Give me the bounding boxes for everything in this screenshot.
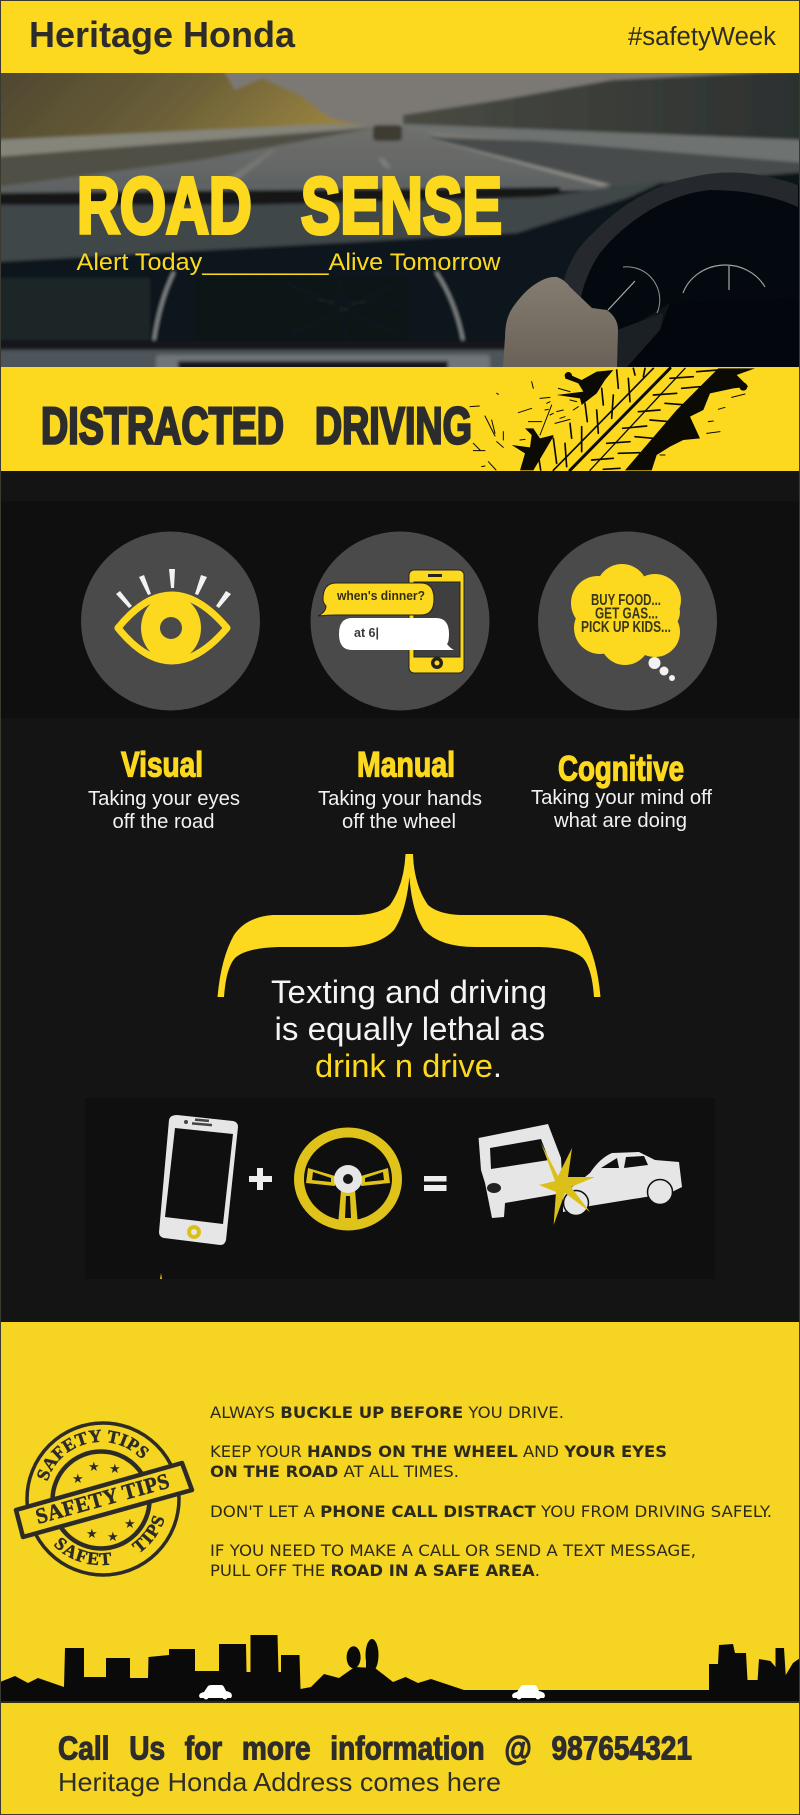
safety tips list: PULL OFF THE ROAD IN A SAFE AREA . [210, 1561, 540, 1580]
city skyline silhouette [0, 1635, 800, 1703]
car [199, 1685, 232, 1700]
safety tips stamp: ★ [86, 1526, 98, 1541]
column: cognitive: Cognitive [558, 750, 684, 788]
icon: phone [159, 1115, 238, 1245]
main title: ROAD SENSE [77, 161, 502, 250]
stamp arc text bottom: SAFET TIPS [54, 1515, 164, 1566]
distracted driving band [0, 367, 800, 471]
brand name: Heritage Honda [29, 14, 296, 55]
safety tips stamp: ★ [88, 1459, 100, 1474]
hero photo: driver's view of highway [0, 68, 800, 373]
safety tips list: ALWAYS BUCKLE UP BEFORE YOU DRIVE. [210, 1403, 564, 1422]
icon: cognitive distraction thought cloud: BUY FOOD... [591, 592, 661, 609]
icon: cognitive distraction thought cloud: GET GAS... [595, 606, 658, 622]
curly brace [218, 854, 600, 997]
statement text: drink n drive. [315, 1048, 502, 1084]
column: manual: off the wheel [342, 811, 456, 833]
equals sign [424, 1176, 446, 1191]
safety tips stamp [14, 1421, 194, 1577]
hashtag: #safetyWeek [628, 23, 776, 51]
icon: cognitive distraction thought cloud [538, 532, 717, 710]
tagline: Alert Today_________Alive Tomorrow [76, 249, 501, 276]
icon: visual distraction eye [81, 532, 260, 710]
steering wheel [563, 172, 800, 367]
section heading: DISTRACTED DRIVING [41, 398, 472, 456]
icon: truck and car crash [479, 1124, 682, 1225]
icon: cognitive distraction thought cloud: PICK UP KIDS... [581, 619, 671, 636]
icon: manual distraction phone and chat: when's dinner? [336, 588, 425, 603]
tire track [470, 368, 755, 470]
column: cognitive [531, 750, 712, 832]
icon: steering wheel [299, 1132, 397, 1226]
plus sign [249, 1168, 272, 1190]
header bar [0, 0, 800, 73]
safety tips stamp: ★ [107, 1529, 119, 1544]
column: cognitive: Taking your mind off [531, 787, 712, 809]
statement text [271, 974, 547, 1084]
safety tips stamp: ★ [124, 1516, 136, 1531]
column: manual: Manual [357, 746, 455, 784]
dark content panel [0, 471, 800, 1322]
safety tips stamp: ★ [109, 1461, 121, 1476]
statement text: is equally lethal as [274, 1011, 545, 1047]
stamp banner [16, 1463, 192, 1537]
phone [409, 570, 464, 673]
column: manual: Taking your hands [318, 788, 482, 810]
safety tips list: DON'T LET A PHONE CALL DISTRACT YOU FROM DRIVING SAFELY. [210, 1502, 772, 1521]
equation: phone plus wheel equals crash [159, 1115, 682, 1279]
column: visual: Taking your eyes [88, 788, 240, 810]
text bubble: question [318, 583, 434, 616]
column: visual: off the road [112, 811, 214, 833]
safety tips list: ON THE ROAD AT ALL TIMES. [210, 1462, 459, 1481]
contact call to action: Call Us for more information @ 987654321 [58, 1730, 692, 1766]
safety tips stamp: SAFETY TIPS [33, 1468, 172, 1529]
car [512, 1685, 545, 1700]
safety tips list: KEEP YOUR HANDS ON THE WHEEL AND YOUR EYES [210, 1442, 667, 1461]
address line: Heritage Honda Address comes here [58, 1767, 501, 1797]
safety tips list: IF YOU NEED TO MAKE A CALL OR SEND A TEXT MESSAGE, [210, 1541, 696, 1560]
column: visual [88, 746, 240, 833]
column: visual: Visual [121, 746, 203, 784]
safety tips list [210, 1403, 772, 1580]
column: cognitive: what are doing [553, 810, 687, 832]
stamp arc text top: SAFETY TIPS [37, 1430, 150, 1481]
text bubble: reply [339, 618, 454, 650]
statement text: Texting and driving [271, 974, 547, 1010]
safety tips panel [0, 1322, 800, 1815]
column: manual [318, 746, 482, 833]
safety tips stamp: ★ [72, 1471, 84, 1486]
icon: manual distraction phone and chat [310, 532, 490, 710]
icon: manual distraction phone and chat: at 6| [354, 626, 379, 640]
driver's hand [503, 277, 618, 367]
